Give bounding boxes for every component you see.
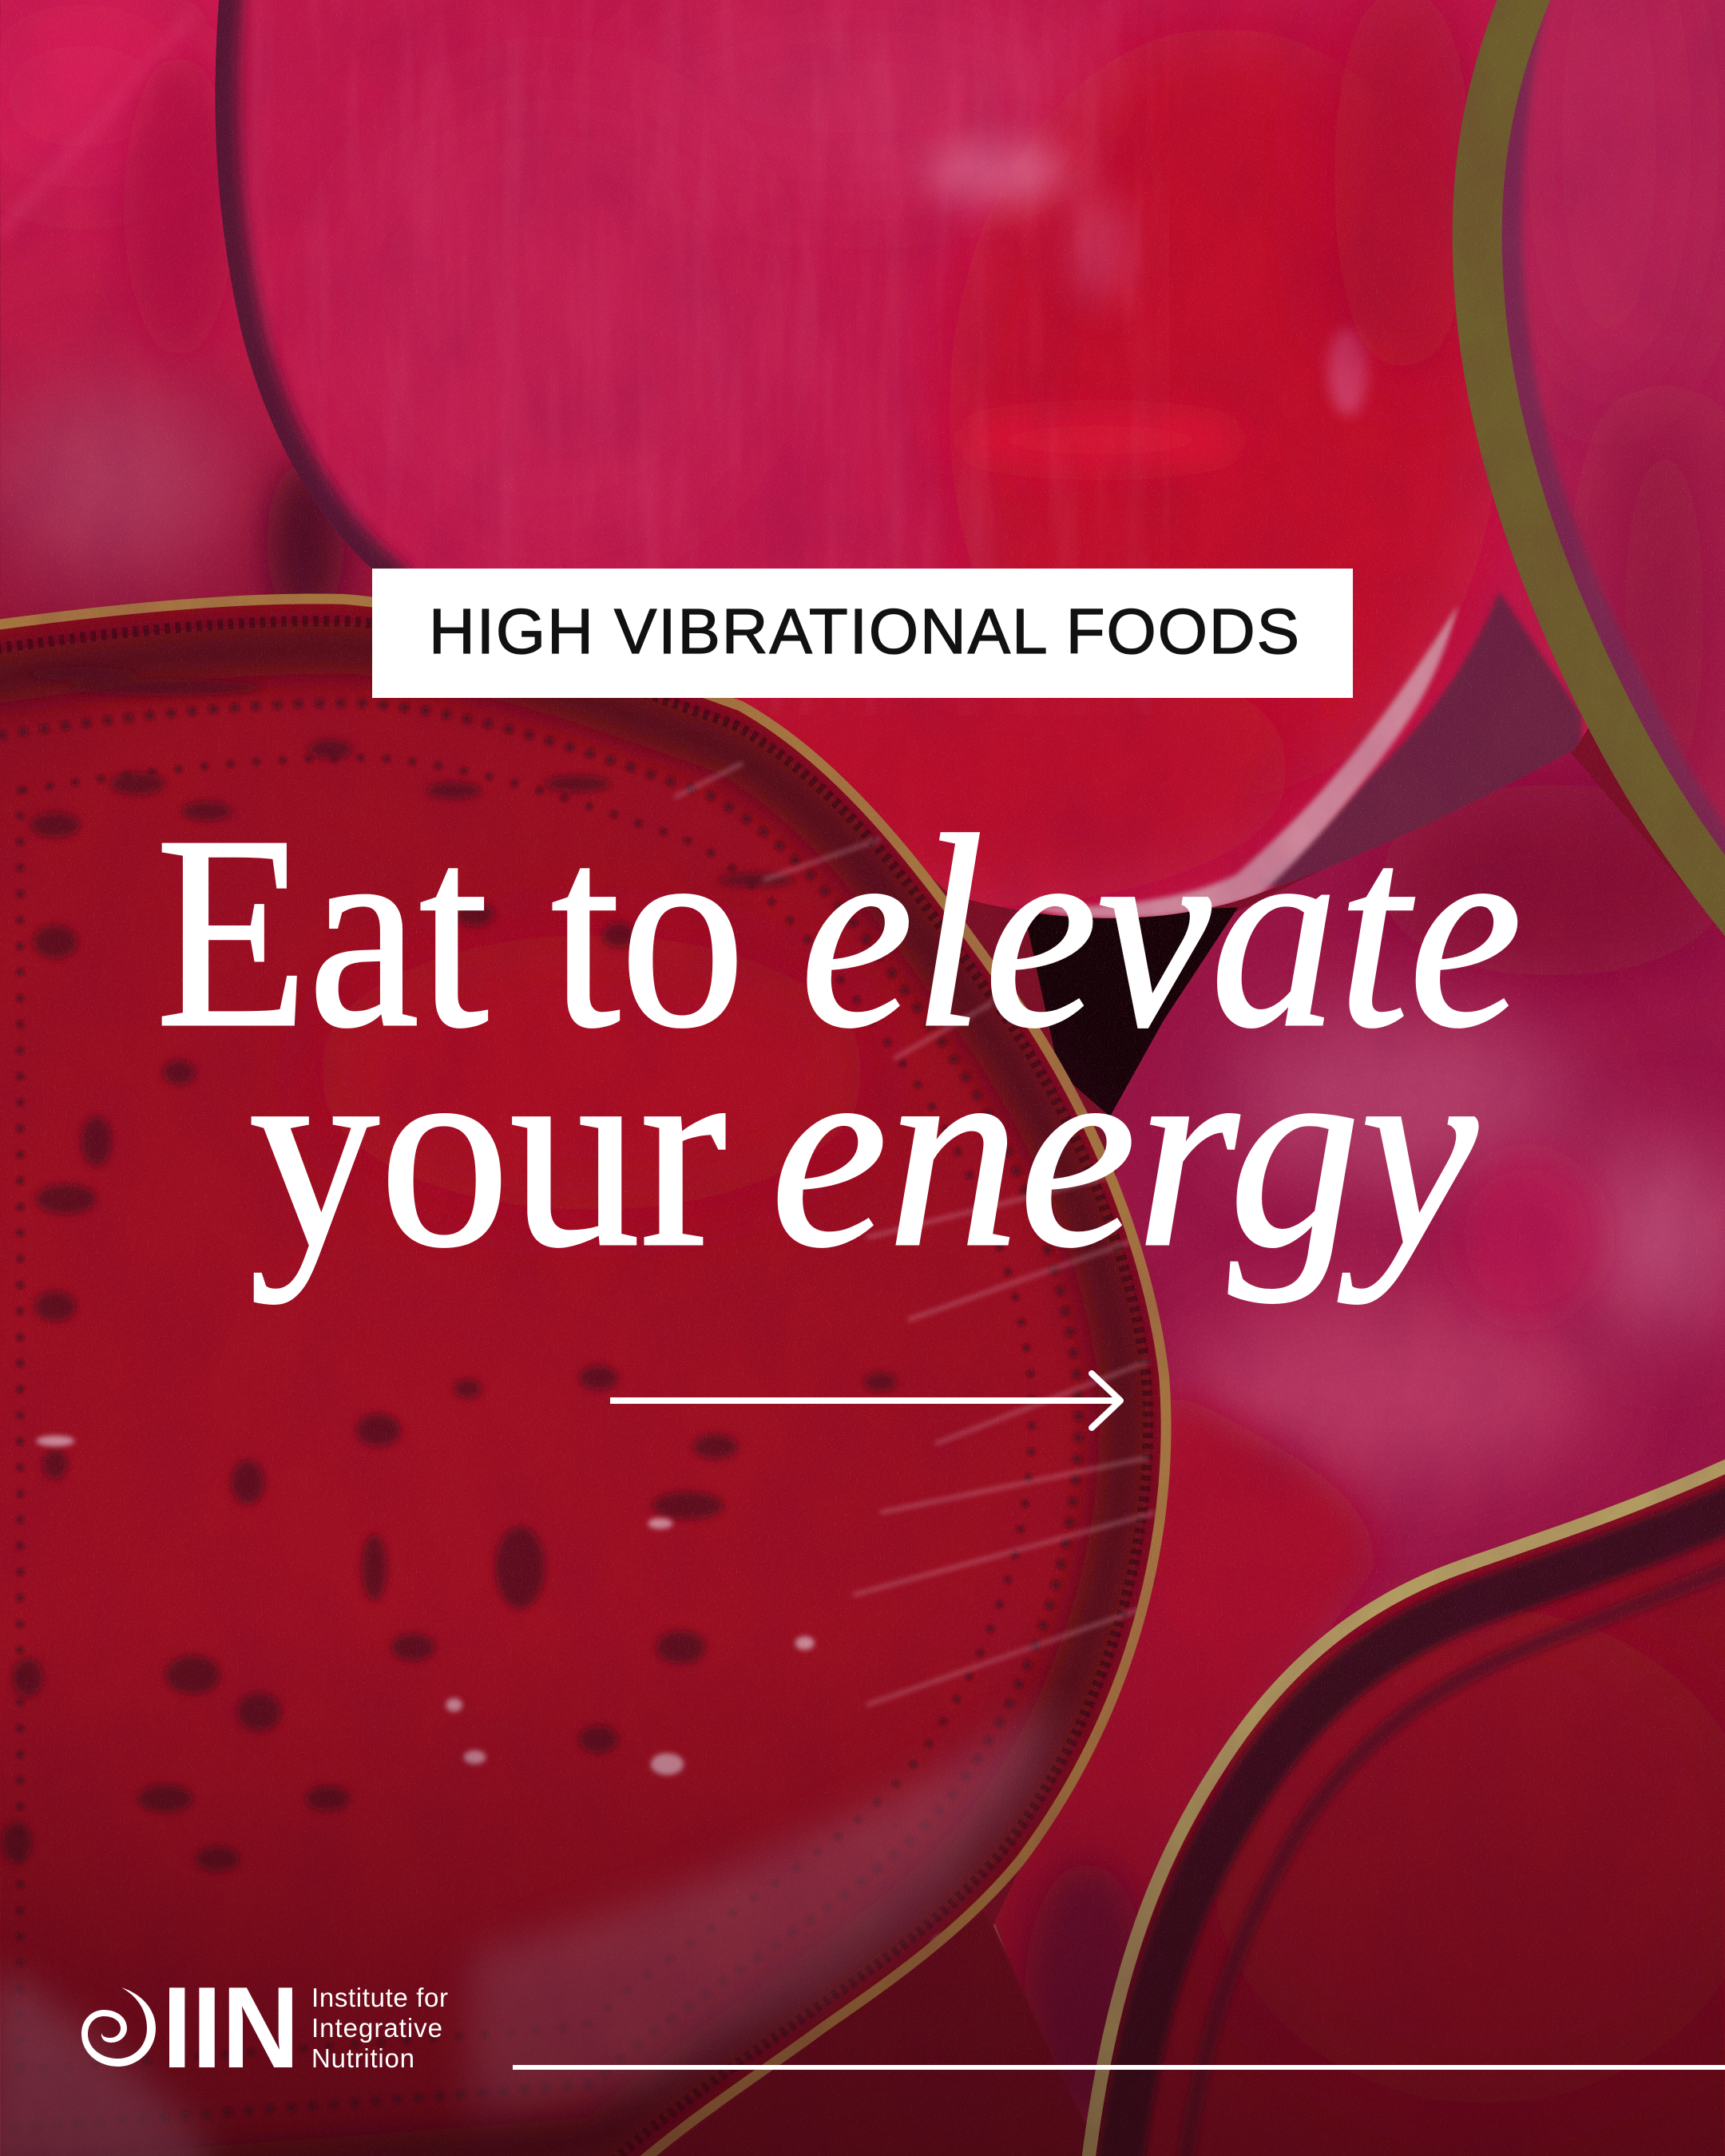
title: your [249,999,727,1304]
logo letters: IIN [162,1963,299,2092]
title: elevate [800,779,1522,1084]
rim: dark rings [1112,1471,1725,2156]
slice: upper left beet [0,0,413,660]
slice: bottom beet under the large slice [619,1911,1114,2156]
title: energy [771,999,1480,1304]
arrow [610,1373,1120,1428]
rim: olive skin [1453,0,1725,1011]
rim: pale streak [1038,605,1458,918]
dark gradient at the foot of the image [0,1623,1725,2156]
icon: spiral [81,1988,156,2067]
streak texture [256,37,1099,569]
rim: purple inner band [1504,0,1725,949]
logo wordmark: Integrative [311,2013,442,2043]
logo: IIN Institute for Integrative Nutrition [81,1963,448,2092]
logo wordmark: Institute for [311,1983,448,2012]
tag: high vibrational foods [372,569,1353,698]
tag: high vibrational foods: HIGH VIBRATIONAL FOODS [429,596,1299,667]
dark flecks [2,667,897,1872]
logo wordmark: Nutrition [311,2043,414,2073]
rim: mauve lower right band [1259,591,1582,894]
dark gap between slices [1025,907,1238,1116]
title: Eat to [156,779,745,1084]
dark ring bands near the edge [0,648,1125,2156]
slice: large left beet [0,577,1196,2156]
title [156,779,1522,1304]
pale flecks [36,1436,966,1948]
slice: right middle beet [963,729,1725,2156]
pale frost at lower rim [0,1698,1059,2156]
slice: top right beet [1430,0,1725,1017]
pale scratches [674,763,1156,1705]
slice: top centre beet [215,0,1588,918]
rim: pale skin [1073,1417,1725,2156]
logo wordmark [311,1983,448,2073]
footer rule [513,2065,1725,2070]
rim: dark purple left edge [215,0,399,591]
slice: bottom right beet [1059,1417,1725,2156]
rim: tan skin [0,593,1172,2156]
